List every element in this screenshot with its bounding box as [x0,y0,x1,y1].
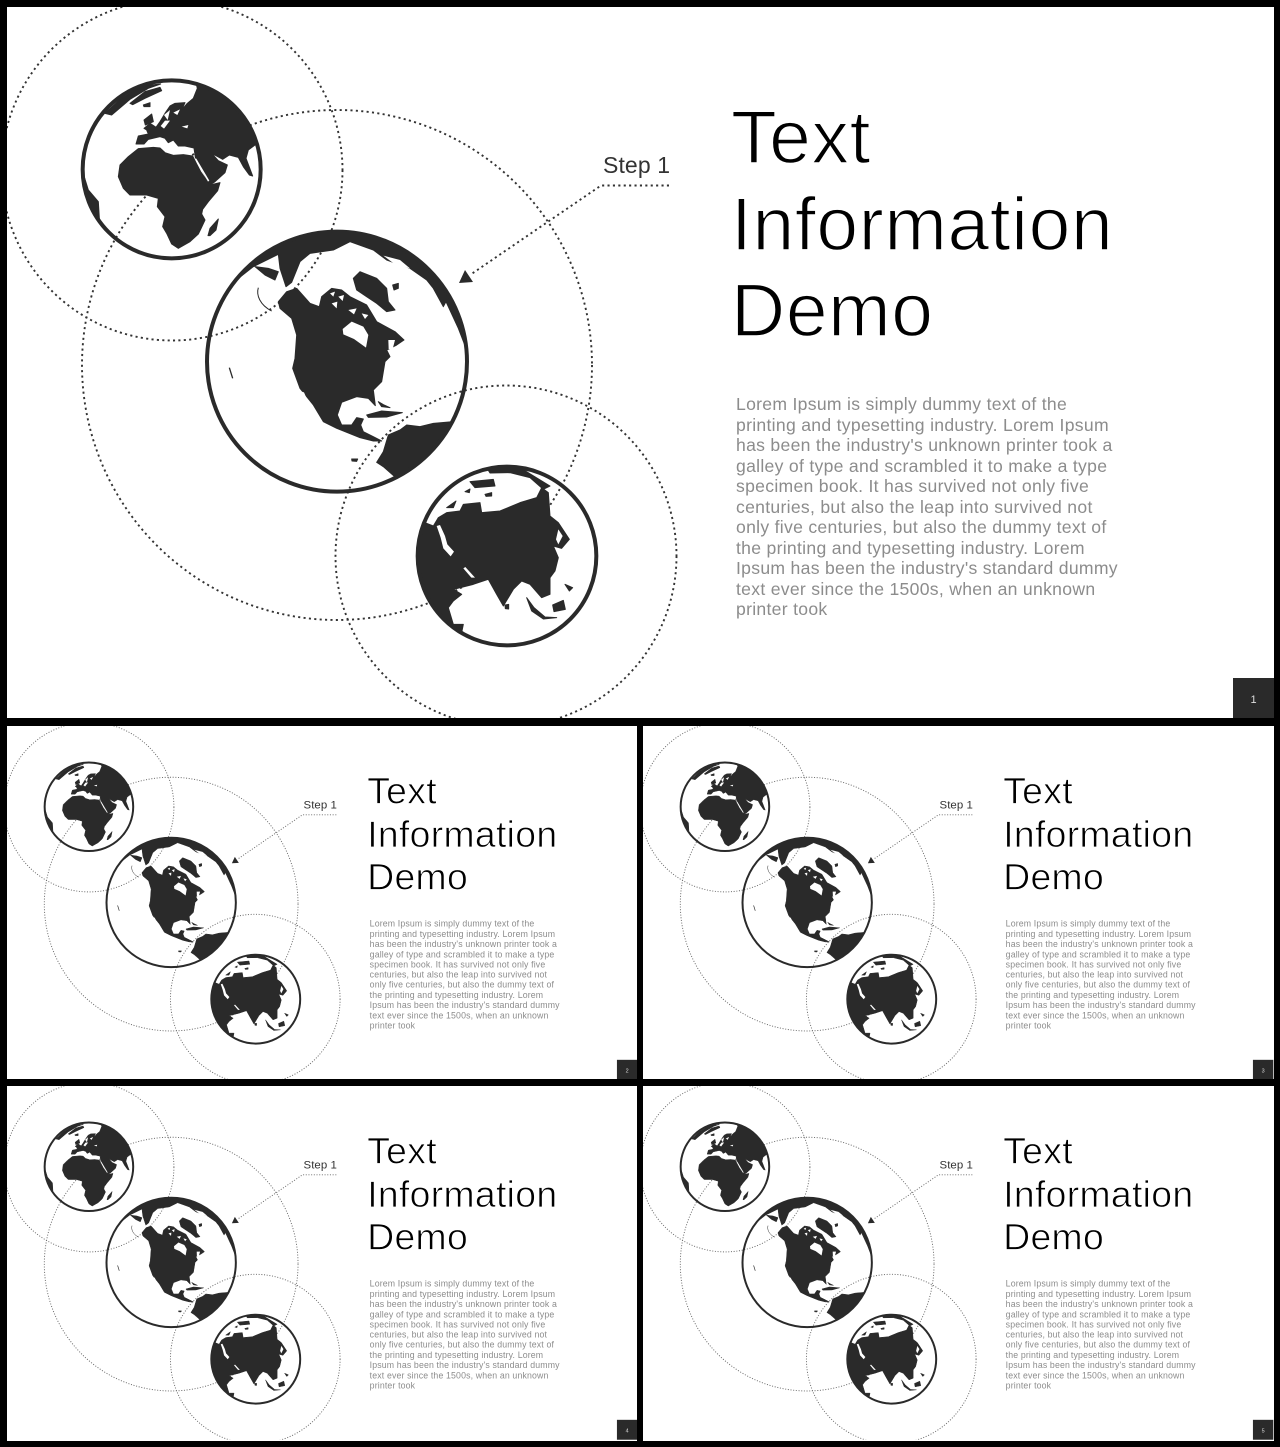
heading: Demo [1003,1216,1104,1258]
globe: Asia [410,467,600,651]
body text: the printing and typesetting industry. Lorem [1006,1350,1179,1360]
body text: only five centuries, but also the dummy text of [370,980,554,990]
page number: 1 [1250,694,1257,706]
page number [617,1420,637,1440]
globes and orbit diagram [643,726,977,1079]
label: step 1: Step 1 [940,798,973,811]
body text [370,919,560,1031]
body text: printer took [370,1381,415,1391]
globes and orbit diagram [7,726,341,1079]
panel: thumbnail slide 2 [7,726,637,1079]
body text [1006,919,1196,1031]
body text: galley of type and scrambled it to make a type [1006,949,1190,959]
body text: specimen book. It has survived not only five [370,959,545,969]
body text: centuries, but also the leap into survived not [736,497,1093,517]
page number [1233,678,1274,718]
body text: printing and typesetting industry. Lorem Ipsum [736,415,1109,435]
page number [617,1060,637,1080]
body text: Lorem Ipsum is simply dummy text of the [370,919,534,928]
heading: Demo [731,268,934,352]
body text: Lorem Ipsum is simply dummy text of the [370,1279,534,1288]
body text: has been the industry's unknown printer took a [370,939,557,949]
body text: galley of type and scrambled it to make a type [370,949,554,959]
globe: North America [207,222,480,492]
body text: text ever since the 1500s, when an unknown [370,1371,548,1380]
body text: text ever since the 1500s, when an unknown [370,1011,548,1020]
panel: thumbnail slide 4 [7,1086,637,1441]
label: step 1: Step 1 [603,152,670,178]
heading: Information [1003,1173,1193,1215]
body text: centuries, but also the leap into survived not [1006,970,1183,980]
body text: galley of type and scrambled it to make a type [370,1309,554,1319]
body text: centuries, but also the leap into survived not [1006,1330,1183,1340]
body text: galley of type and scrambled it to make a type [1006,1309,1190,1319]
heading: Demo [1003,856,1104,898]
label: step 1: Step 1 [940,1158,973,1171]
body text [736,394,1118,619]
body text: printing and typesetting industry. Lorem Ipsum [370,929,555,939]
body text: printing and typesetting industry. Lorem Ipsum [1006,929,1191,939]
heading [367,1130,557,1258]
body text: the printing and typesetting industry. Lorem [736,538,1085,558]
page number: 5 [1262,1428,1265,1434]
heading [1003,1130,1193,1258]
body text: the printing and typesetting industry. Lorem [1006,990,1179,1000]
body text: specimen book. It has survived not only five [370,1319,545,1329]
body text: has been the industry's unknown printer took a [736,435,1113,455]
heading: Demo [367,856,468,898]
heading [1003,770,1193,898]
body text: only five centuries, but also the dummy text of [370,1340,554,1350]
heading: Information [367,1173,557,1215]
body text: only five centuries, but also the dummy text of [1006,980,1190,990]
page number: 3 [1262,1068,1265,1074]
body text: Ipsum has been the industry's standard dummy [736,558,1118,578]
body text: text ever since the 1500s, when an unknown [1006,1371,1184,1380]
body text: has been the industry's unknown printer took a [370,1299,557,1309]
page number: 4 [626,1428,629,1434]
label: step 1: Step 1 [304,798,337,811]
body text: centuries, but also the leap into survived not [370,1330,547,1340]
body text: Ipsum has been the industry's standard dummy [1006,1000,1196,1010]
heading: Demo [367,1216,468,1258]
body text [370,1279,560,1391]
globes and orbit diagram [643,1086,977,1440]
body text: the printing and typesetting industry. Lorem [370,1350,543,1360]
heading: Text [1003,1130,1073,1172]
body text: Ipsum has been the industry's standard dummy [370,1360,560,1370]
body text: only five centuries, but also the dummy text of [736,517,1107,537]
heading: Information [1003,813,1193,855]
body text: Lorem Ipsum is simply dummy text of the [736,394,1067,414]
body text: printing and typesetting industry. Lorem Ipsum [1006,1289,1191,1299]
body text: Lorem Ipsum is simply dummy text of the [1006,1279,1170,1288]
body text: specimen book. It has survived not only five [736,476,1089,496]
page number [1253,1060,1273,1080]
label: step 1: Step 1 [304,1158,337,1171]
body text: printer took [1006,1021,1051,1031]
body text [1006,1279,1196,1391]
body text: specimen book. It has survived not only five [1006,959,1181,969]
heading [367,770,557,898]
heading: Text [367,1130,437,1172]
heading [731,95,1113,352]
page number [1253,1420,1273,1440]
body text: the printing and typesetting industry. Lorem [370,990,543,1000]
body text: has been the industry's unknown printer took a [1006,939,1193,949]
heading: Text [367,770,437,812]
body text: text ever since the 1500s, when an unknown [1006,1011,1184,1020]
heading: Text [1003,770,1073,812]
body text: printer took [736,599,828,619]
heading: Information [731,182,1113,266]
arrow: callout leader [459,186,669,283]
page number: 2 [626,1068,629,1074]
dotted orbit circles [2,0,676,726]
heading: Text [731,95,871,179]
body text: printing and typesetting industry. Lorem Ipsum [370,1289,555,1299]
globes and orbit diagram [7,1086,341,1440]
panel: main slide [7,7,1274,718]
panel: thumbnail slide 5 [643,1086,1274,1441]
body text: galley of type and scrambled it to make a type [736,456,1107,476]
panel: thumbnail slide 3 [643,726,1274,1079]
body text: printer took [1006,1381,1051,1391]
body text: has been the industry's unknown printer took a [1006,1299,1193,1309]
body text: Ipsum has been the industry's standard dummy [1006,1360,1196,1370]
body text: only five centuries, but also the dummy text of [1006,1340,1190,1350]
globe: Africa and Europe [77,80,267,258]
body text: text ever since the 1500s, when an unknown [736,579,1095,599]
globes and orbit diagram [7,7,678,718]
body text: printer took [370,1021,415,1031]
body text: specimen book. It has survived not only five [1006,1319,1181,1329]
body text: Ipsum has been the industry's standard dummy [370,1000,560,1010]
body text: centuries, but also the leap into survived not [370,970,547,980]
heading: Information [367,813,557,855]
body text: Lorem Ipsum is simply dummy text of the [1006,919,1170,928]
